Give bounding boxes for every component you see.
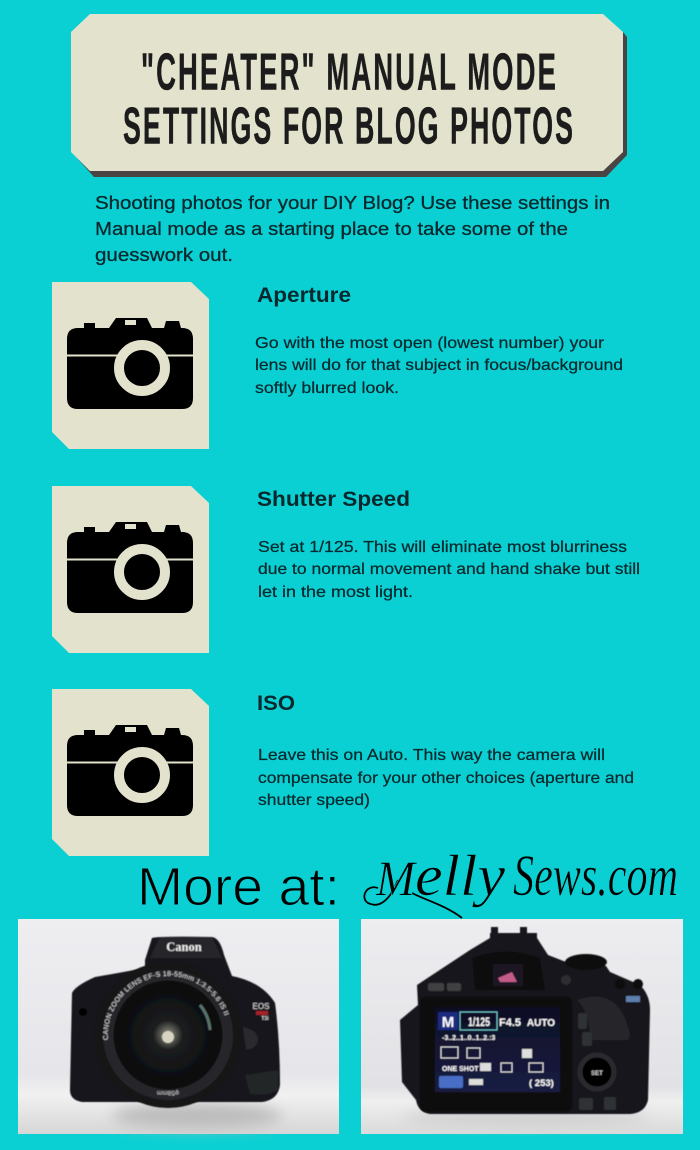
site name: MellySews.com xyxy=(364,843,678,918)
LCD screen: AUTO xyxy=(527,1018,555,1029)
camera body front: Canon xyxy=(166,940,202,954)
text: aperture xyxy=(255,335,623,397)
intro text xyxy=(95,193,610,265)
LCD screen: -3..2..1..0..1..2.:3 xyxy=(442,1035,495,1042)
text: shutter speed: Set at 1/125. This will eliminate most blurriness xyxy=(258,539,627,556)
control dial xyxy=(580,1055,614,1089)
photo: camera front xyxy=(18,919,339,1140)
title banner xyxy=(71,14,627,177)
icon: camera card, shutter speed xyxy=(52,486,209,653)
LCD screen: 1/125 xyxy=(468,1015,490,1029)
heading: ISO: ISO xyxy=(257,692,295,715)
lens xyxy=(102,965,233,1109)
text: aperture: Go with the most open (lowest number) your xyxy=(255,335,605,352)
text: ISO: compensate for your other choices (aperture and xyxy=(258,770,634,787)
LCD screen: ( 253) xyxy=(529,1078,554,1089)
LCD screen xyxy=(420,997,572,1112)
title text xyxy=(123,44,575,156)
text: aperture: lens will do for that subject in focus/background xyxy=(255,357,623,374)
text: aperture: softly blurred look. xyxy=(255,380,399,397)
heading: shutter speed: Shutter Speed xyxy=(257,488,410,511)
more at label: More at: xyxy=(137,857,340,917)
intro text: Shooting photos for your DIY Blog? Use these settings in xyxy=(95,193,610,213)
photo: camera back xyxy=(361,919,683,1134)
text: shutter speed: let in the most light. xyxy=(258,584,413,601)
text: ISO: Leave this on Auto. This way the camera will xyxy=(258,747,605,764)
intro text: guesswork out. xyxy=(95,245,233,265)
icon: camera card, ISO xyxy=(52,689,209,856)
camera body front: EOS xyxy=(253,1002,269,1011)
text: ISO xyxy=(258,747,634,809)
heading: aperture: Aperture xyxy=(257,284,351,307)
text: shutter speed xyxy=(258,539,640,601)
intro text: Manual mode as a starting place to take some of the xyxy=(95,219,568,239)
LCD screen: F4.5 xyxy=(499,1017,521,1029)
text: shutter speed: due to normal movement and hand shake but still xyxy=(258,561,640,578)
lens: φ58mm xyxy=(157,1089,179,1096)
control dial: SET xyxy=(591,1071,603,1077)
site name: MellySews.com: elly xyxy=(415,843,505,908)
text: ISO: shutter speed) xyxy=(258,792,370,809)
camera body back xyxy=(400,927,650,1114)
icon: camera card, aperture xyxy=(52,282,209,449)
site name: MellySews.com: M xyxy=(375,850,417,906)
LCD screen: M xyxy=(442,1014,454,1031)
lens: CANON ZOOM LENS EF-S 18-55mm 1:3.5-5.6 IS II xyxy=(102,970,230,1041)
camera body front xyxy=(70,937,280,1102)
camera body front: T3i xyxy=(261,1016,269,1022)
LCD screen: ONE SHOT xyxy=(442,1066,479,1073)
